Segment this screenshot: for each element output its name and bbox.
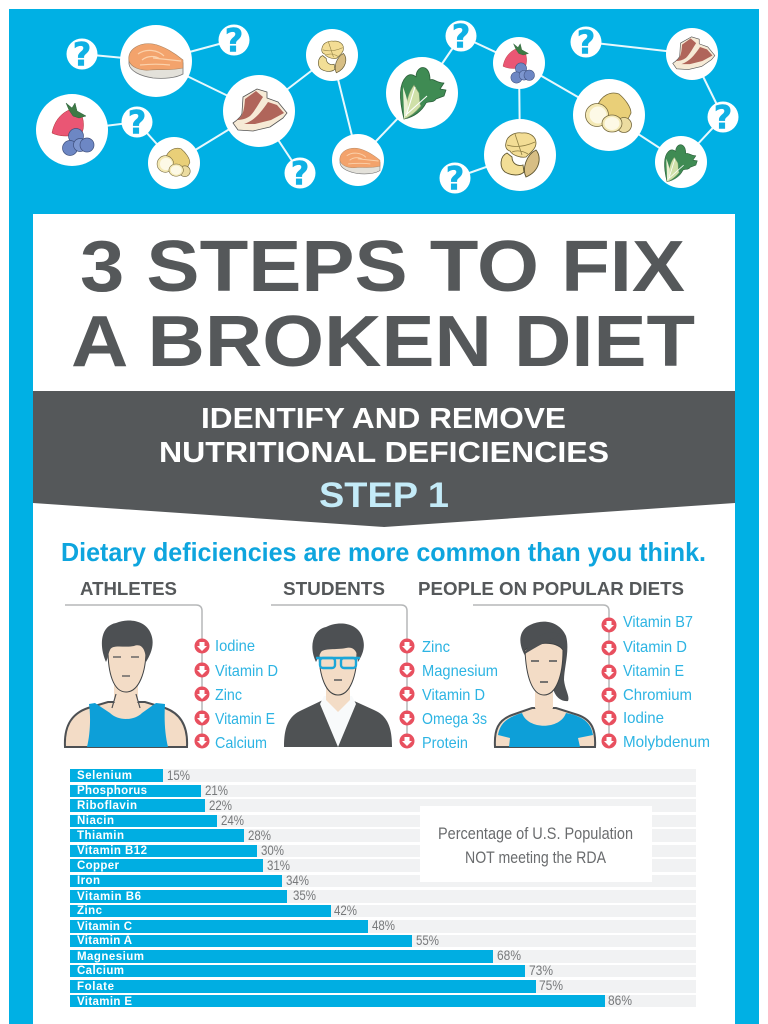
bar labels: Magnesium	[77, 951, 144, 963]
list: athlete deficiencies	[194, 638, 278, 752]
chart legend box: Percentage of U.S. Population	[438, 824, 633, 843]
heading: athletes: ATHLETES	[80, 579, 177, 599]
icon: question marks: ?	[577, 24, 595, 62]
bar values: 22%	[209, 797, 232, 813]
bar labels: Selenium	[77, 770, 132, 782]
bar values: 21%	[205, 782, 228, 798]
bar labels: Copper	[77, 860, 120, 872]
list: student deficiencies: Vitamin D	[422, 687, 485, 704]
step number: STEP 1	[319, 476, 449, 515]
bar values: 73%	[529, 962, 553, 978]
bar values: 30%	[261, 842, 284, 858]
step banner	[33, 391, 735, 527]
list: diet deficiencies: Molybdenum	[623, 734, 710, 751]
illustration: student	[284, 624, 392, 747]
title: A BROKEN DIET	[71, 302, 695, 382]
icon: berries small	[493, 37, 545, 89]
bar labels: Vitamin A	[77, 935, 132, 947]
chart bars	[70, 769, 605, 1007]
chart legend box: NOT meeting the RDA	[465, 848, 607, 867]
chart legend box	[420, 806, 652, 882]
icon: potatoes large	[573, 79, 645, 151]
bar labels: Phosphorus	[77, 785, 147, 797]
bar labels: Calcium	[77, 965, 124, 977]
icon: question marks	[66, 18, 738, 198]
white content panel	[33, 214, 735, 1024]
bar values: 48%	[372, 917, 395, 933]
bar values: 68%	[497, 947, 521, 963]
icon: question marks: ?	[446, 160, 464, 198]
icon: question marks: ?	[452, 18, 470, 56]
list: athlete deficiencies: Vitamin E	[215, 711, 275, 728]
icon: nuts large	[484, 119, 556, 191]
bar chart: percentage of population not meeting RDA	[70, 767, 696, 1008]
bar labels: Riboflavin	[77, 800, 137, 812]
icon: potatoes small	[148, 137, 200, 189]
bar values: 35%	[293, 887, 316, 903]
bar labels: Vitamin B12	[77, 845, 147, 857]
icon: salmon large	[120, 25, 192, 97]
bar labels: Folate	[77, 981, 114, 993]
icon: steak large	[223, 75, 295, 147]
bar values: 55%	[416, 932, 439, 948]
list: athlete deficiencies: Calcium	[215, 735, 267, 752]
bar values: 28%	[248, 827, 271, 843]
list: athlete deficiencies: Iodine	[215, 638, 255, 655]
bar values: 24%	[221, 812, 244, 828]
list: student deficiencies: Magnesium	[422, 663, 498, 680]
bar labels: Vitamin E	[77, 996, 132, 1008]
icon: glasses	[316, 658, 360, 668]
icon: question marks: ?	[225, 22, 243, 60]
list: athlete deficiencies: Zinc	[215, 687, 242, 704]
panel: people on popular diets	[418, 579, 710, 751]
list: athlete deficiencies: Vitamin D	[215, 663, 278, 680]
illustration: athlete	[65, 621, 187, 747]
list: student deficiencies: Zinc	[422, 639, 450, 656]
bar labels: Thiamin	[77, 830, 124, 842]
list: diet deficiencies	[602, 614, 710, 751]
bar values: 31%	[267, 857, 290, 873]
chart tracks	[70, 769, 696, 1007]
bar labels: Vitamin C	[77, 921, 132, 933]
bar values: 75%	[539, 977, 563, 993]
illustration: woman	[495, 622, 595, 747]
bar values: 42%	[334, 902, 357, 918]
list: diet deficiencies: Vitamin D	[623, 639, 687, 656]
list: diet deficiencies: Vitamin E	[623, 663, 684, 680]
food network illustration	[36, 18, 738, 198]
title	[71, 227, 695, 382]
bar labels: Zinc	[77, 905, 103, 917]
bar labels: Iron	[77, 875, 100, 887]
banner heading: IDENTIFY AND REMOVE	[201, 403, 566, 435]
heading: students: STUDENTS	[283, 579, 385, 599]
icon: lettuce large	[386, 57, 458, 129]
list: diet deficiencies: Vitamin B7	[623, 614, 693, 631]
icon: question marks: ?	[291, 154, 309, 192]
list: diet deficiencies: Chromium	[623, 687, 692, 704]
icon: nuts small	[306, 29, 358, 81]
bar values: 86%	[608, 992, 632, 1008]
icon: question marks: ?	[73, 36, 91, 74]
panel: students	[271, 579, 498, 752]
bar values: 15%	[167, 767, 190, 783]
list: diet deficiencies: Iodine	[623, 710, 664, 727]
panel: athletes	[65, 579, 278, 752]
bar labels: Vitamin B6	[77, 891, 141, 903]
banner heading: NUTRITIONAL DEFICIENCIES	[159, 437, 609, 469]
bar labels: Niacin	[77, 815, 114, 827]
bar values: 34%	[286, 872, 309, 888]
banner heading	[159, 403, 609, 469]
bar values	[167, 767, 632, 1008]
icon: lettuce small	[655, 136, 707, 188]
icon: steak small	[666, 28, 718, 80]
list: student deficiencies: Protein	[422, 735, 468, 752]
network connecting lines	[72, 36, 723, 178]
subheading: Dietary deficiencies are more common than you think.	[61, 537, 706, 567]
icon: question marks: ?	[128, 104, 146, 142]
bar labels	[77, 770, 147, 1008]
icon: salmon small	[332, 134, 384, 186]
list: student deficiencies	[400, 638, 498, 752]
icon: berries large	[36, 94, 108, 166]
list: student deficiencies: Omega 3s	[422, 711, 487, 728]
heading: popular diets: PEOPLE ON POPULAR DIETS	[418, 579, 684, 599]
title: 3 STEPS TO FIX	[80, 227, 685, 307]
icon: question marks: ?	[714, 98, 732, 136]
